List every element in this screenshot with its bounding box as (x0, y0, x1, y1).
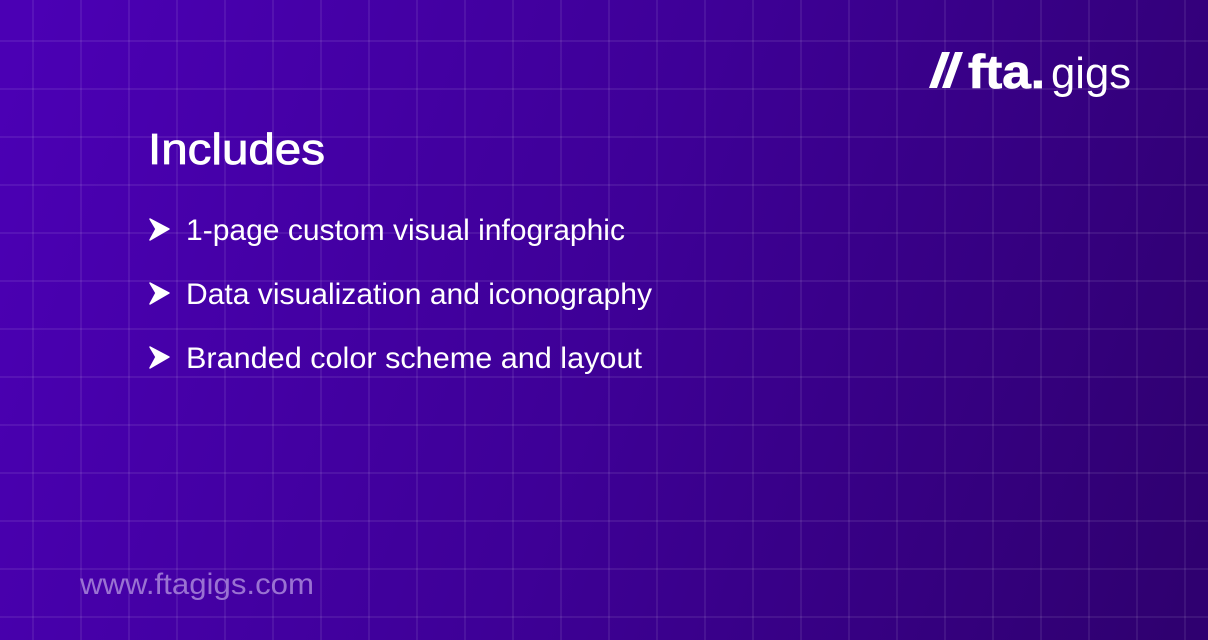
logo: fta.gigs (929, 45, 1131, 98)
list item 3 (150, 342, 643, 375)
item text: Data visualization and iconography (186, 278, 652, 311)
icon: double slash (929, 52, 963, 88)
item text: Branded color scheme and layout (186, 342, 643, 375)
heading: Includes (148, 125, 325, 174)
item text: 1-page custom visual infographic (186, 214, 625, 247)
logo wordmark regular: gigs (1051, 49, 1131, 98)
logo wordmark bold: fta. (968, 45, 1045, 98)
icon: arrow bullet (150, 283, 169, 304)
website url: www.ftagigs.com (79, 568, 314, 601)
list of inclusions (150, 214, 652, 375)
icon: arrow bullet (150, 219, 169, 240)
list item 1 (150, 214, 625, 247)
list item 2 (150, 278, 652, 311)
icon: arrow bullet (150, 347, 169, 368)
